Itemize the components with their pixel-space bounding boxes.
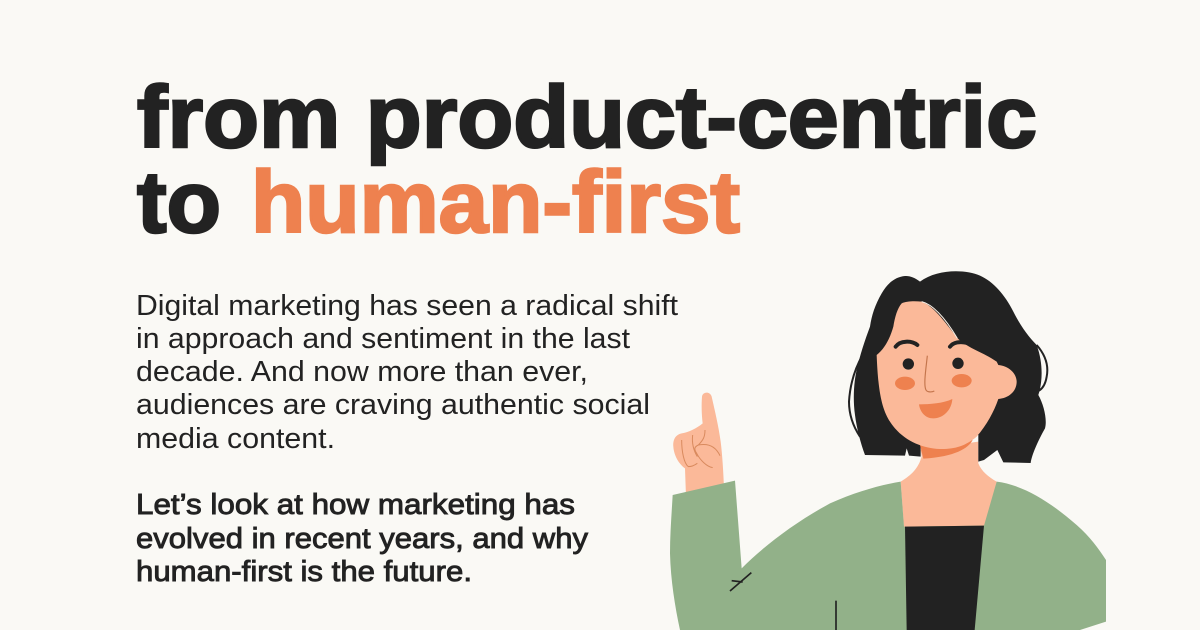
neck and chest: [901, 442, 997, 528]
hand: [673, 393, 724, 497]
nose: [925, 356, 934, 392]
face: [877, 301, 1017, 449]
intro paragraph: media content.: [136, 423, 335, 455]
finger lines: [682, 430, 720, 468]
head: [849, 271, 1047, 463]
left eyebrow: [896, 342, 917, 347]
left cheek: [895, 377, 915, 390]
jacket and torso: [670, 442, 1106, 630]
hair: [854, 271, 1046, 463]
title: to: [137, 154, 221, 251]
title: human-first: [251, 154, 740, 251]
sleeve crease: [730, 573, 751, 591]
top: [905, 526, 984, 630]
neck shadow: [920, 440, 973, 459]
call to action paragraph: human-first is the future.: [136, 556, 472, 588]
title: from product-centric: [137, 69, 1037, 166]
stray hair strands: [849, 345, 1047, 437]
call to action paragraph: evolved in recent years, and why: [136, 523, 589, 555]
jacket fold: [833, 601, 838, 630]
title: [137, 69, 1037, 251]
intro paragraph: in approach and sentiment in the last: [136, 323, 630, 355]
right cheek: [952, 374, 972, 387]
right eye: [952, 358, 964, 369]
hair highlight: [922, 302, 957, 338]
jacket: [670, 481, 1106, 630]
intro paragraph: [136, 290, 678, 455]
right eyebrow: [950, 342, 967, 347]
call to action paragraph: [136, 489, 589, 588]
left eye: [903, 358, 914, 370]
intro paragraph: Digital marketing has seen a radical shift: [136, 290, 678, 322]
mouth: [919, 399, 952, 418]
intro paragraph: audiences are craving authentic social: [136, 389, 650, 421]
intro paragraph: decade. And now more than ever,: [136, 356, 588, 388]
call to action paragraph: Let’s look at how marketing has: [136, 489, 575, 521]
illustration: woman pointing up: [670, 271, 1106, 630]
